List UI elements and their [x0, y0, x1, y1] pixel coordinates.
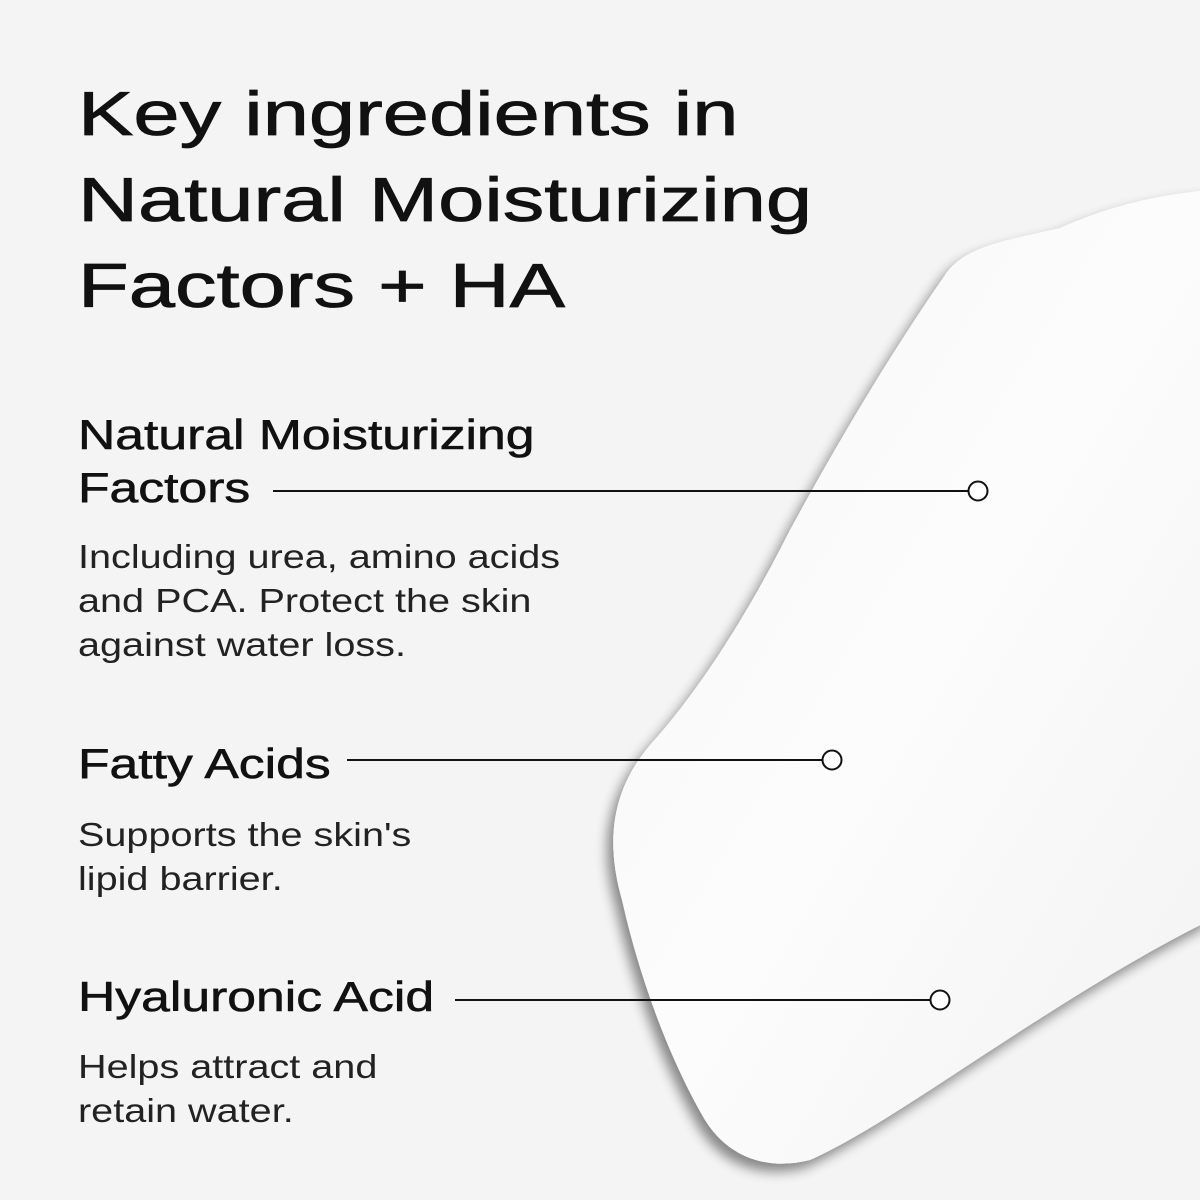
text: HA [78, 1048, 377, 1129]
text: Fatty Acids: lipid barrier. [78, 860, 283, 897]
heading: NMF: Factors [78, 464, 250, 511]
text: NMF: and PCA. Protect the skin [78, 582, 531, 619]
title: Key ingredients in [78, 80, 738, 149]
text: NMF: Including urea, amino acids [78, 538, 560, 575]
connector: HA [455, 990, 950, 1010]
heading: NMF: Natural Moisturizing [78, 411, 535, 458]
text: Fatty Acids: Supports the skin's [78, 816, 411, 853]
text: HA: retain water. [78, 1092, 294, 1129]
text: NMF: against water loss. [78, 626, 406, 663]
title [78, 80, 812, 321]
connector: Fatty Acids [347, 750, 842, 770]
title: Factors + HA [78, 252, 565, 321]
connector: NMF [273, 480, 988, 502]
heading: Hyaluronic Acid: Hyaluronic Acid [78, 973, 434, 1020]
text: Fatty Acids [78, 816, 411, 897]
text: HA: Helps attract and [78, 1048, 377, 1085]
heading: NMF [78, 411, 535, 511]
title: Natural Moisturizing [78, 166, 812, 235]
heading: Fatty Acids: Fatty Acids [78, 740, 331, 787]
text: NMF [78, 538, 560, 663]
